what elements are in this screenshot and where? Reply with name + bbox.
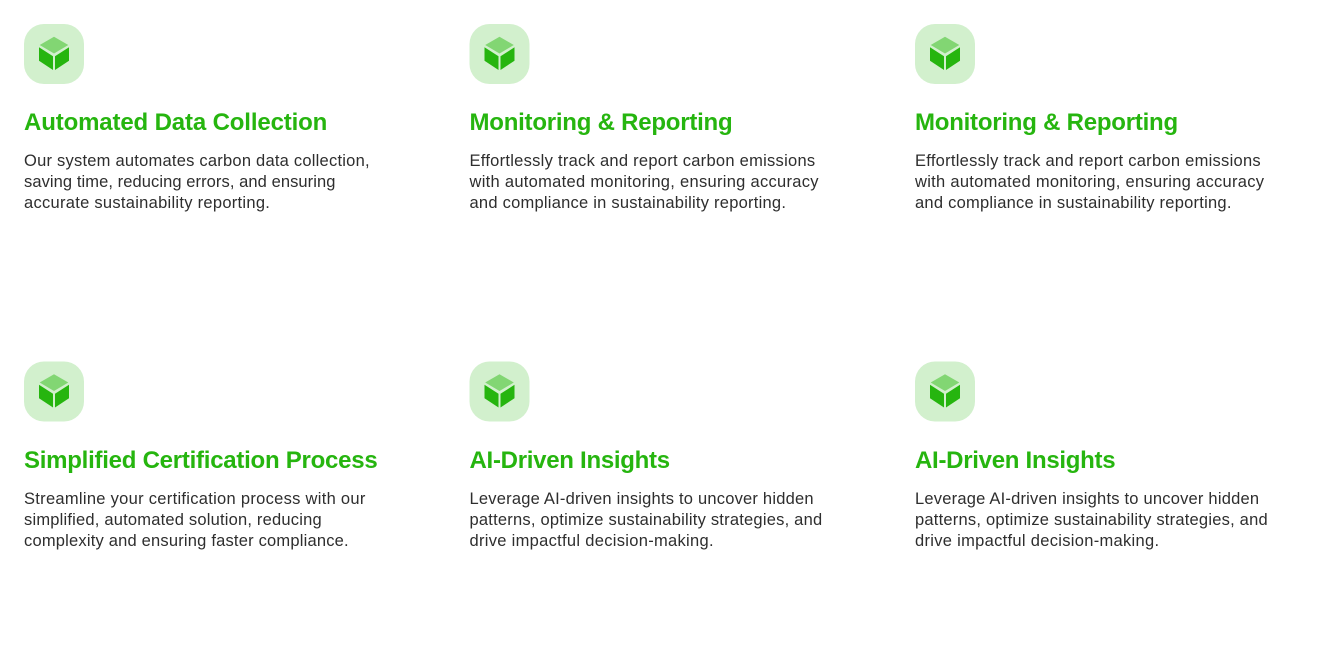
heading: Monitoring & Reporting (915, 109, 1178, 136)
text block: Effortlessly track and report carbon emissions (470, 152, 815, 170)
heading: AI-Driven Insights (470, 446, 670, 474)
icon: green cube (915, 24, 975, 84)
text block: saving time, reducing errors, and ensuring (24, 173, 336, 191)
text block: Leverage AI-driven insights to uncover hidden (470, 490, 814, 508)
text block: patterns, optimize sustainability strategies, and (915, 510, 1268, 528)
text block: Effortlessly track and report carbon emissions (915, 152, 1261, 170)
text block: accurate sustainability reporting. (24, 194, 270, 212)
text block: and compliance in sustainability reporting. (470, 194, 786, 212)
text block: and compliance in sustainability reporting. (915, 194, 1232, 212)
text block: simplified, automated solution, reducing (24, 510, 322, 528)
heading: AI-Driven Insights (915, 446, 1115, 474)
text block: with automated monitoring, ensuring accuracy (915, 173, 1264, 191)
text block (470, 152, 819, 212)
panel: Monitoring & Reporting (second) (915, 24, 1264, 212)
heading: Automated Data Collection (24, 109, 327, 136)
text block: Our system automates carbon data collection, (24, 152, 370, 170)
text block: drive impactful decision-making. (915, 532, 1159, 550)
text block (915, 152, 1264, 212)
text block: complexity and ensuring faster compliance. (24, 532, 349, 550)
panel: Monitoring & Reporting (first) (470, 24, 819, 212)
text block (24, 152, 370, 212)
icon: green cube (470, 362, 530, 422)
icon: green cube (24, 362, 84, 422)
text block: patterns, optimize sustainability strategies, and (470, 510, 822, 528)
text block: Streamline your certification process with our (24, 490, 366, 508)
panel: Simplified Certification Process (24, 362, 377, 550)
text block: Leverage AI-driven insights to uncover hidden (915, 490, 1259, 508)
text block: with automated monitoring, ensuring accuracy (470, 173, 819, 191)
panel: AI-Driven Insights (second) (915, 362, 1268, 550)
icon: green cube (470, 24, 530, 84)
panel: Automated Data Collection (24, 24, 370, 212)
text block (915, 490, 1268, 550)
icon: green cube (915, 362, 975, 422)
text block: drive impactful decision-making. (470, 532, 714, 550)
panel: AI-Driven Insights (first) (470, 362, 822, 550)
heading: Monitoring & Reporting (470, 109, 732, 136)
heading: Simplified Certification Process (24, 446, 377, 474)
text block (24, 490, 366, 550)
text block (470, 490, 822, 550)
icon: green cube (24, 24, 84, 84)
